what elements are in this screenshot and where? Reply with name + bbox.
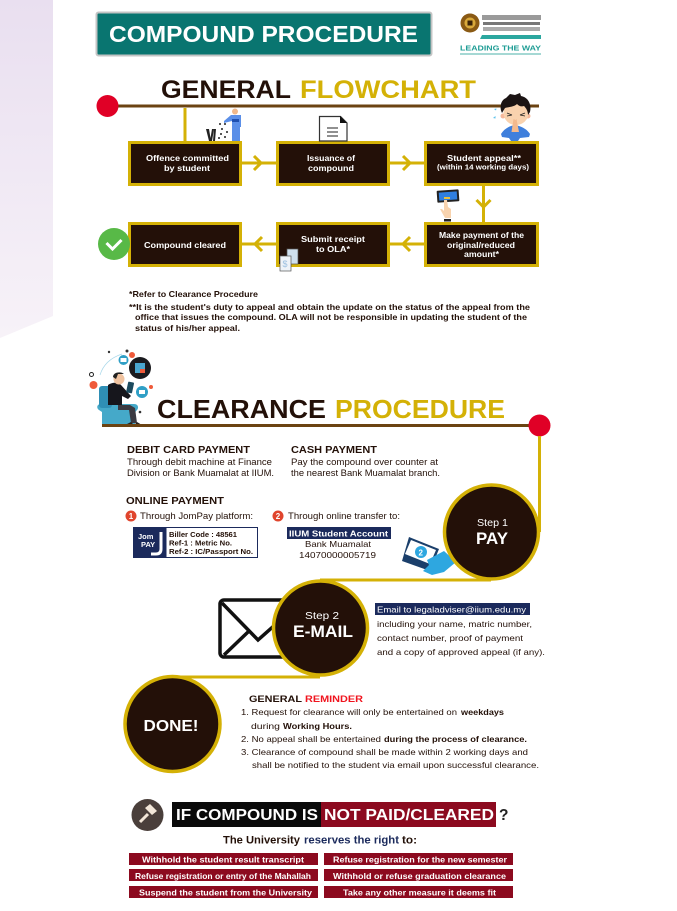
step 2 circle: E-MAIL	[293, 623, 353, 641]
university logo	[460, 14, 541, 55]
option 2: online transfer: IIUM Student Account	[289, 528, 388, 538]
banner: if compound is not paid: NOT PAID/CLEARED	[324, 807, 494, 824]
text: debit card payment: Through debit machine at Finance	[127, 457, 272, 467]
email instructions: including your name, matric number,	[377, 619, 532, 629]
email instructions: contact number, proof of payment	[377, 633, 524, 643]
title banner: COMPOUND PROCEDURE	[109, 21, 418, 47]
subheading: university reserves the right	[223, 834, 417, 846]
box: student appeal	[426, 142, 538, 184]
box: make payment	[426, 224, 538, 266]
icon: green check	[98, 228, 130, 260]
text: debit card payment: Division or Bank Muamalat at IIUM.	[127, 468, 274, 478]
footnotes: status of his/her appeal.	[135, 323, 240, 333]
icon: cash in hand: 2	[418, 548, 424, 558]
general reminder: 2. No appeal shall be entertained	[241, 734, 381, 744]
box: offence committed: by student	[164, 163, 210, 173]
background band	[0, 0, 53, 338]
icon: person littering	[206, 108, 241, 141]
box: offence committed	[130, 142, 240, 184]
general reminder: weekdays	[460, 707, 504, 717]
option 2: online transfer: 14070000005719	[299, 550, 376, 560]
general reminder: GENERAL	[249, 694, 302, 705]
general reminder: REMINDER	[305, 694, 363, 705]
done circle: DONE!	[144, 718, 198, 735]
option 1: jompay	[126, 510, 258, 558]
option 1: jompay: Ref-1 : Metric No.	[169, 540, 232, 548]
header line with red dot	[96, 95, 539, 117]
option 2: online transfer: Through online transfer to:	[288, 511, 400, 521]
consequences list: Refuse registration or entry of the Mahallah	[135, 871, 311, 881]
subheading: university reserves the right: reserves the right	[304, 834, 399, 846]
heading: clearance procedure: CLEARANCE	[157, 394, 326, 424]
text: cash payment: CASH PAYMENT	[291, 445, 377, 456]
box: offence committed: Offence committed	[146, 153, 229, 163]
subheading: university reserves the right: The University	[223, 834, 301, 846]
done circle	[125, 676, 220, 772]
icon: document	[320, 116, 347, 141]
option 1: jompay: Jom	[138, 532, 154, 541]
box: compound cleared: Compound cleared	[144, 240, 226, 250]
heading: general flowchart: GENERAL	[161, 76, 291, 104]
heading: clearance procedure	[157, 394, 505, 424]
option 1: jompay: Ref-2 : IC/Passport No.	[169, 549, 253, 556]
option 1: jompay: PAY	[141, 540, 155, 549]
box: make payment: Make payment of the	[439, 230, 524, 240]
option 1: jompay: Biller Code : 48561	[169, 532, 237, 539]
email instructions	[375, 603, 545, 657]
icon: cash in hand	[402, 537, 456, 575]
heading: clearance procedure: PROCEDURE	[335, 394, 505, 424]
university logo: LEADING THE WAY	[460, 46, 541, 52]
box: submit receipt: Submit receipt	[301, 234, 365, 244]
box: issuance of compound: Issuance of	[307, 153, 355, 163]
general reminder: 3. Clearance of compound shall be made within 2 working days and	[241, 747, 528, 757]
icon: phone and hand	[437, 189, 459, 222]
consequences list: Withhold or refuse graduation clearance	[333, 871, 506, 881]
general reminder: 1. Request for clearance will only be entertained on	[241, 707, 457, 717]
heading: general flowchart: FLOWCHART	[300, 76, 476, 104]
heading: general flowchart	[161, 76, 476, 104]
consequences list: Suspend the student from the University	[139, 888, 312, 898]
box: submit receipt	[278, 224, 388, 266]
step 1 circle: Step 1	[477, 517, 508, 529]
banner: if compound is not paid	[172, 802, 508, 827]
text: cash payment: Pay the compound over counter at	[291, 457, 439, 467]
box: submit receipt: to OLA*	[316, 244, 351, 254]
icon: receipt: $	[282, 259, 288, 269]
email instructions: and a copy of approved appeal (if any).	[377, 647, 545, 657]
text: online payment: ONLINE PAYMENT	[126, 496, 224, 507]
consequences list: Take any other measure it deems fit	[343, 888, 496, 898]
email instructions: Email to legaladviser@iium.edu.my	[377, 604, 527, 614]
icon: envelope	[220, 600, 294, 657]
text: cash payment	[291, 445, 440, 478]
step 1 circle	[444, 485, 538, 579]
process path	[172, 436, 540, 677]
box: compound cleared	[130, 224, 240, 266]
banner: if compound is not paid: IF COMPOUND IS	[176, 807, 318, 824]
step 1 circle: PAY	[476, 529, 509, 548]
box: issuance of compound: compound	[308, 163, 354, 173]
consequences list: Refuse registration for the new semester	[333, 854, 508, 864]
box: make payment: amount*	[464, 249, 500, 259]
title banner	[96, 12, 432, 56]
footnotes: *Refer to Clearance Procedure	[129, 289, 258, 299]
box: student appeal: (within 14 working days)	[437, 162, 530, 172]
option 2: online transfer	[272, 510, 400, 560]
general reminder: during	[251, 721, 280, 731]
box: issuance of compound	[278, 142, 388, 184]
footnotes	[129, 289, 530, 333]
icon: pleading student	[493, 93, 530, 141]
consequences list	[129, 853, 513, 898]
box: make payment: original/reduced	[447, 240, 515, 250]
general reminder: during the process of clearance.	[384, 734, 527, 744]
box: student appeal: Student appeal**	[447, 153, 522, 163]
subheading: university reserves the right: to:	[402, 834, 417, 846]
footnotes: **It is the student's duty to appeal and obtain the update on the status of the appeal from the	[129, 302, 530, 312]
general reminder	[241, 694, 539, 770]
general reminder: shall be notified to the student via email upon successful clearance.	[252, 760, 539, 770]
general reminder: Working Hours.	[283, 721, 352, 731]
consequences list: Withhold the student result transcript	[142, 854, 304, 864]
step 2 circle: Step 2	[305, 610, 339, 622]
step 2 circle	[274, 581, 368, 675]
banner: if compound is not paid: ?	[499, 807, 508, 824]
icon: receipt	[280, 249, 298, 271]
icon: gavel	[132, 799, 164, 831]
flow connectors	[185, 108, 490, 251]
option 1: jompay: 1	[129, 512, 134, 521]
option 1: jompay: Through JomPay platform:	[140, 511, 253, 521]
illustration: businessman in armchair	[90, 350, 153, 425]
option 2: online transfer: Bank Muamalat	[305, 539, 372, 549]
text: cash payment: the nearest Bank Muamalat branch.	[291, 468, 440, 478]
clearance line with red dot	[102, 414, 550, 436]
footnotes: office that issues the compound. OLA will not be responsible in updating the student of the	[135, 312, 527, 322]
text: debit card payment	[127, 445, 274, 478]
option 2: online transfer: 2	[276, 512, 281, 521]
text: debit card payment: DEBIT CARD PAYMENT	[127, 445, 250, 456]
